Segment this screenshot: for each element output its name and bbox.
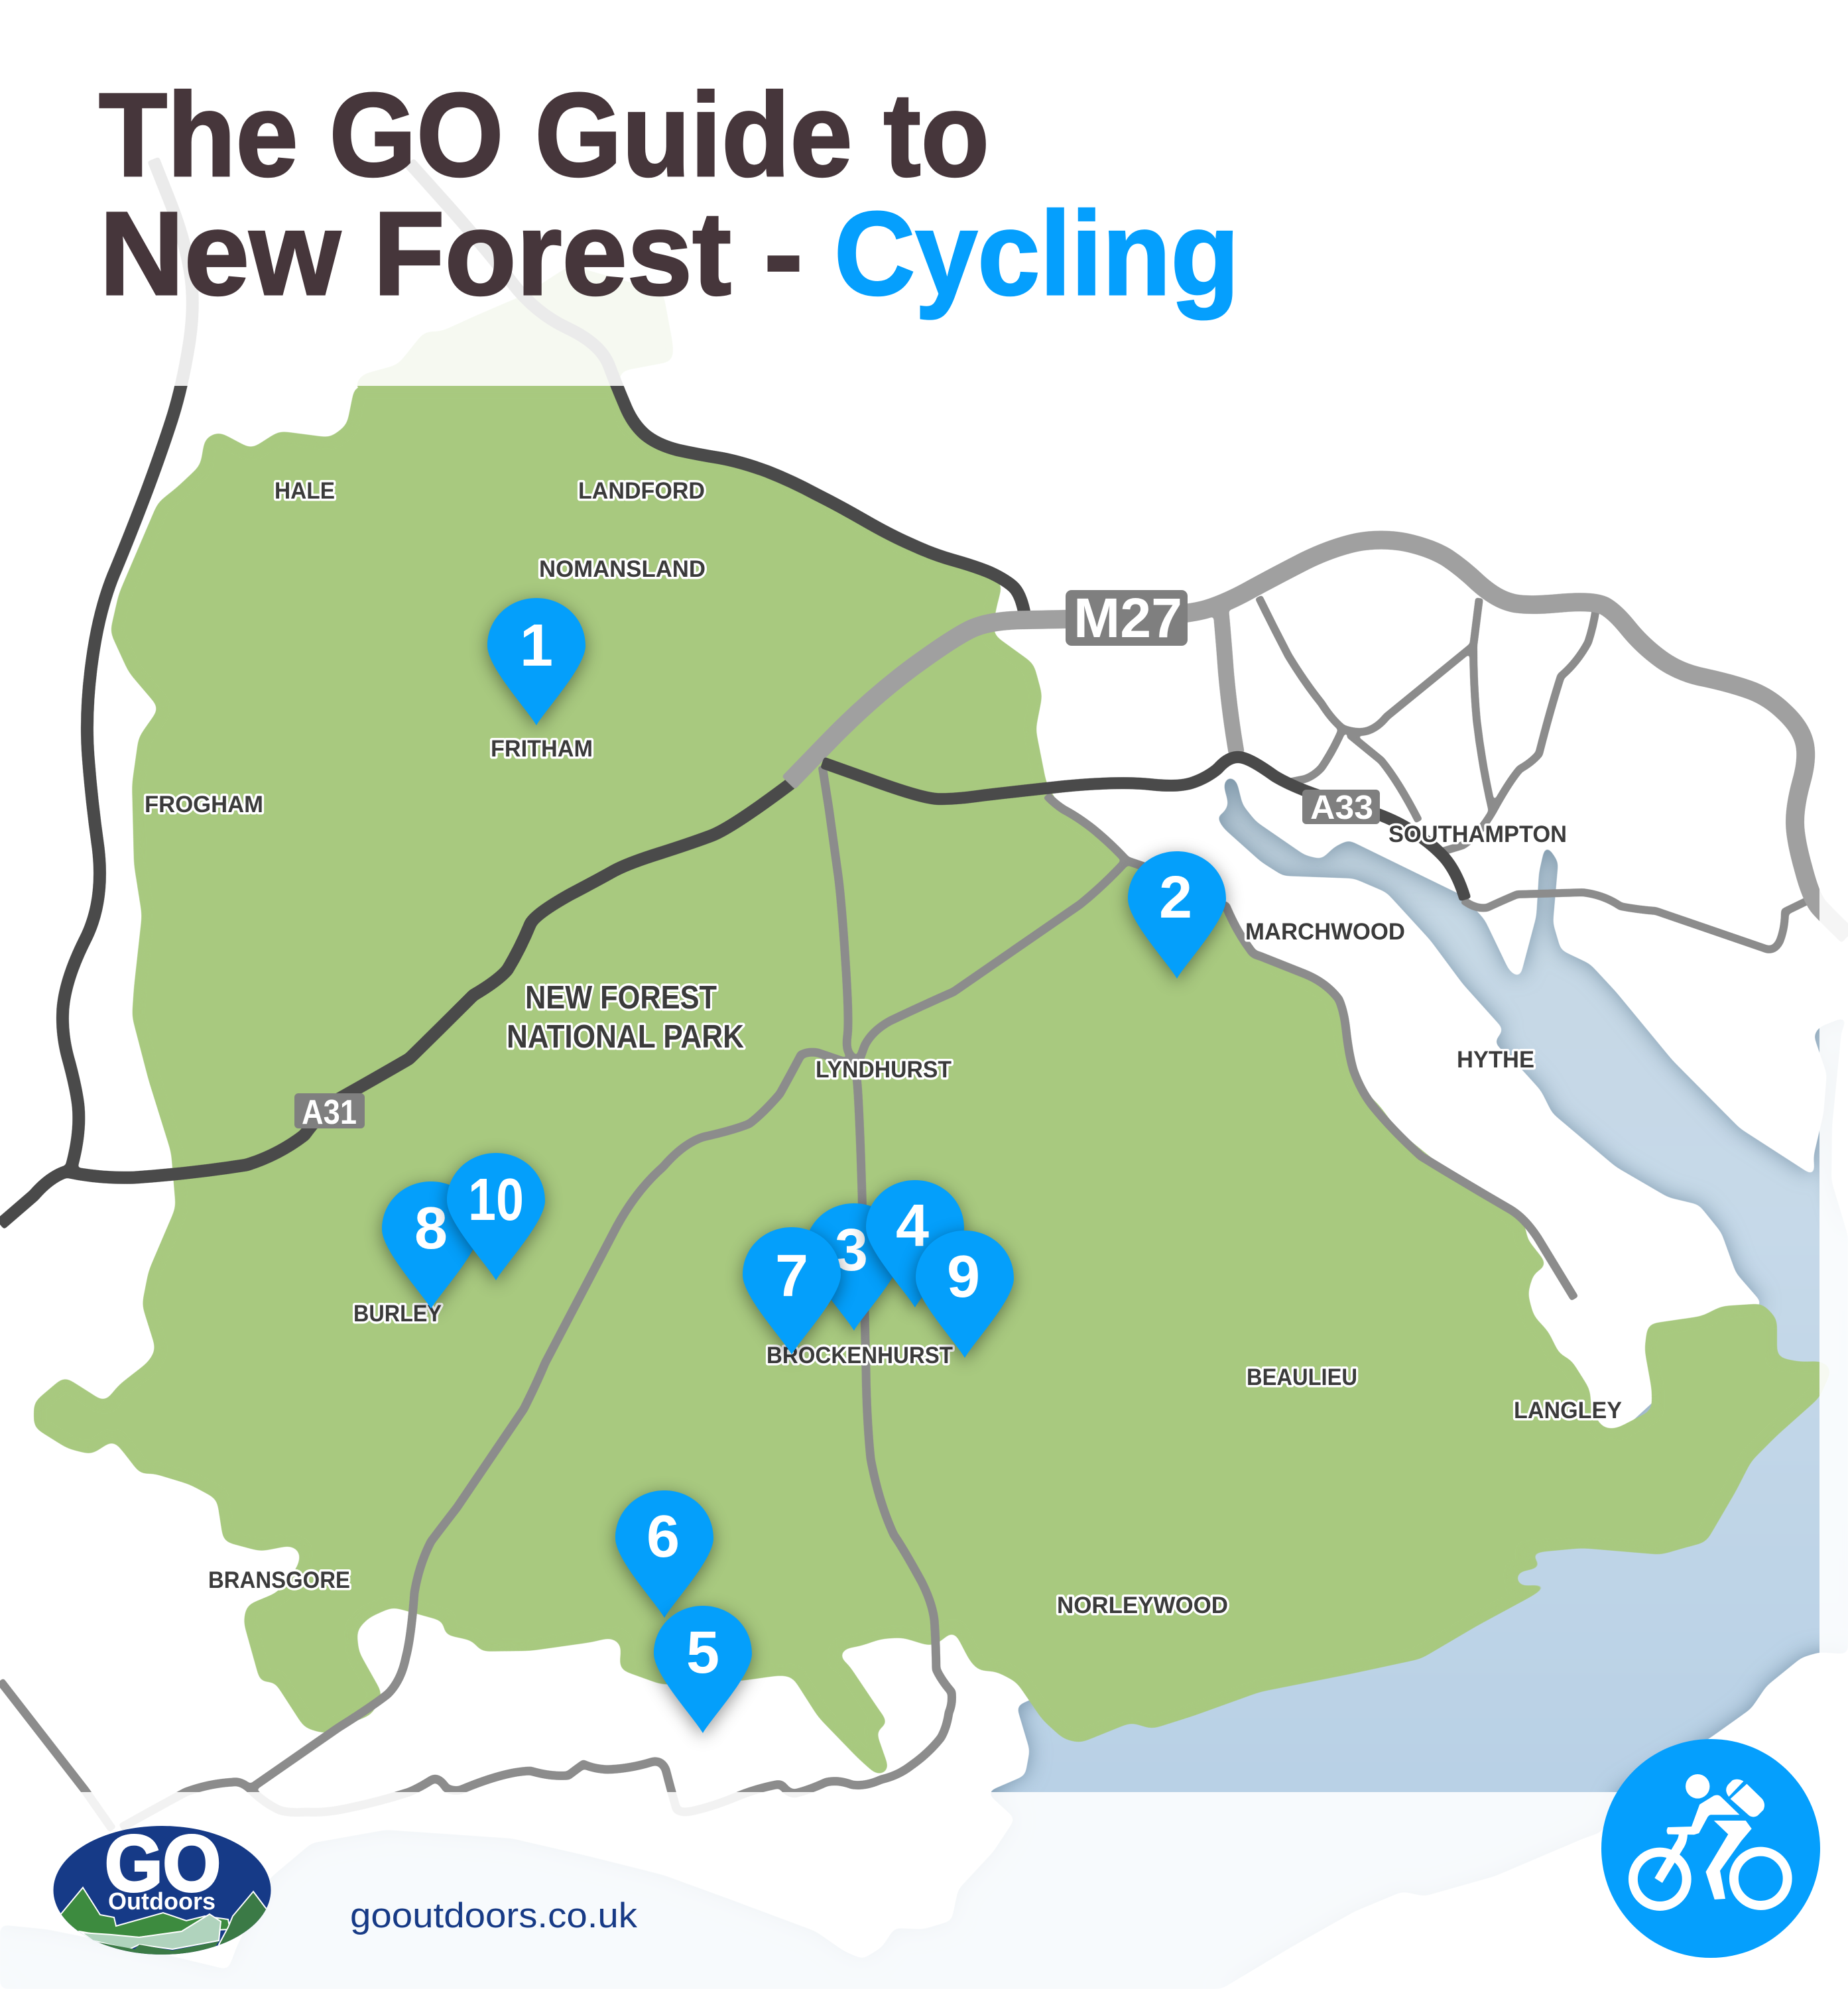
map pin 6: 6 xyxy=(647,1504,680,1570)
title: Cycling xyxy=(834,187,1239,320)
website address: gooutdoors.co.uk xyxy=(350,1896,638,1935)
map pin 5: 5 xyxy=(686,1620,719,1686)
map pin 4: 4 xyxy=(896,1193,929,1259)
label: Southampton: SOUTHAMPTON xyxy=(1388,821,1567,847)
map pin 3 xyxy=(805,1203,903,1331)
road A33 xyxy=(822,757,1465,900)
label: Marchwood: MARCHWOOD xyxy=(1245,919,1405,945)
label: Bransgore: BRANSGORE xyxy=(208,1567,350,1593)
national park land area xyxy=(34,386,1832,1776)
place labels xyxy=(145,478,1622,1618)
map pin 7: 7 xyxy=(775,1243,808,1309)
water: estuary and sea xyxy=(0,776,1848,1989)
map pin 1 xyxy=(487,598,585,725)
minor roads xyxy=(0,597,1808,1830)
title: The GO Guide to xyxy=(99,68,989,201)
map pin 4 xyxy=(866,1180,964,1307)
faded map edge: top xyxy=(0,0,1848,386)
map pin 2: 2 xyxy=(1159,865,1192,931)
label: Frogham: FROGHAM xyxy=(145,792,263,817)
label: National Park: NATIONAL PARK xyxy=(507,1019,744,1055)
label: Brockenhurst: BROCKENHURST xyxy=(767,1343,953,1368)
label: New Forest: NEW FOREST xyxy=(525,980,717,1016)
road badge: M27: M27 xyxy=(1074,587,1182,649)
map pin 6 xyxy=(615,1490,713,1618)
label: Burley: BURLEY xyxy=(353,1301,442,1327)
road badge: A33: A33 xyxy=(1310,788,1373,826)
label: Nomansland: NOMANSLAND xyxy=(539,556,706,582)
motorway M27 xyxy=(788,540,1848,936)
label: Norleywood: NORLEYWOOD xyxy=(1057,1593,1228,1618)
faded map edge: bottom xyxy=(0,1792,1848,1989)
map pin 10 xyxy=(447,1153,545,1280)
faded map edge: right xyxy=(1819,386,1848,1792)
title xyxy=(99,68,1239,320)
logo: GO Outdoors xyxy=(53,1826,271,1955)
logo: GO Outdoors: Outdoors xyxy=(108,1888,216,1915)
icon: cyclist badge xyxy=(1601,1739,1820,1958)
label: Hale: HALE xyxy=(275,478,335,504)
label: Hythe: HYTHE xyxy=(1457,1047,1534,1073)
map pin 5 xyxy=(654,1606,752,1733)
label: Lyndhurst: LYNDHURST xyxy=(816,1057,952,1083)
label: Beaulieu: BEAULIEU xyxy=(1247,1364,1357,1390)
label: Langley: LANGLEY xyxy=(1514,1398,1622,1423)
map pin 8 xyxy=(382,1181,480,1309)
map pin 9: 9 xyxy=(947,1244,980,1310)
map pin 8: 8 xyxy=(414,1195,448,1262)
map pin 9 xyxy=(916,1231,1014,1358)
label: Fritham: FRITHAM xyxy=(491,736,593,762)
map pin 1: 1 xyxy=(520,613,553,679)
label: Landford: LANDFORD xyxy=(578,478,705,504)
map pin 10: 10 xyxy=(468,1167,524,1233)
map pin 3: 3 xyxy=(835,1217,868,1284)
title: New Forest - xyxy=(99,187,803,320)
main dark roads: west, A31 and north xyxy=(0,159,1025,1225)
map pin 7 xyxy=(743,1227,841,1355)
road badge: A31: A31 xyxy=(302,1093,357,1132)
faded land beyond the top of the map xyxy=(355,265,673,391)
map pin 2 xyxy=(1128,851,1226,979)
logo: GO Outdoors: GO xyxy=(105,1819,221,1908)
